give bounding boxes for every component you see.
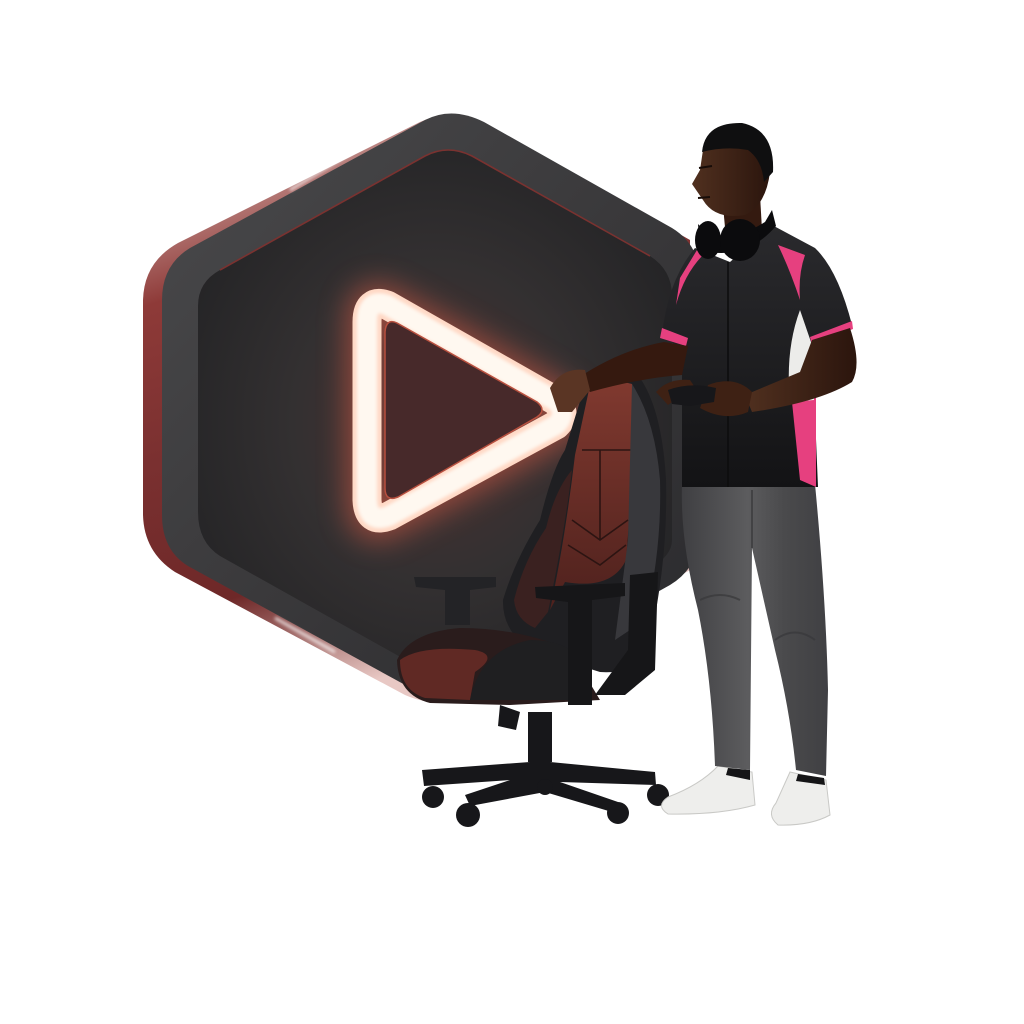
chair base xyxy=(422,705,669,827)
badge dark frame xyxy=(162,113,700,700)
chair left armrest xyxy=(414,577,496,625)
far arm xyxy=(578,342,688,392)
right shoe xyxy=(771,772,830,825)
badge inner panel xyxy=(198,150,672,674)
hexagon badge xyxy=(143,113,700,702)
chair right armrest xyxy=(535,583,625,705)
shirt zipper xyxy=(727,262,729,487)
gaming chair xyxy=(397,375,669,827)
socks xyxy=(726,768,825,785)
neon play icon xyxy=(366,303,566,521)
headphones xyxy=(695,210,776,261)
eye and mouth xyxy=(698,166,712,198)
near arm xyxy=(745,328,857,412)
chair left wing xyxy=(514,470,572,628)
game controller xyxy=(668,385,716,406)
hair xyxy=(702,123,773,182)
neon triangle outline xyxy=(367,303,562,518)
shirt white panel xyxy=(789,310,814,402)
chair back shell xyxy=(503,375,666,672)
head xyxy=(692,128,770,216)
chair seat xyxy=(397,628,600,705)
chair back leather xyxy=(550,381,637,610)
chair side support xyxy=(595,572,658,695)
pants xyxy=(682,484,828,776)
neon inner triangle xyxy=(385,322,542,498)
chair seat cushion xyxy=(400,649,488,700)
standing gamer xyxy=(550,123,857,825)
shirt xyxy=(662,225,852,487)
neon glow xyxy=(366,303,566,521)
badge metallic rim xyxy=(143,115,690,702)
far hand on chair xyxy=(550,370,590,412)
left shoe xyxy=(662,766,755,814)
rim highlights xyxy=(163,152,352,652)
chair side bolster xyxy=(615,384,660,640)
chair stitching xyxy=(568,450,634,565)
shirt pink trim xyxy=(660,245,853,487)
neon bright core xyxy=(367,303,562,518)
holding hand xyxy=(700,381,752,416)
neck xyxy=(722,195,762,238)
panel red edge light xyxy=(220,150,650,270)
chair seat side xyxy=(470,640,585,700)
pants folds xyxy=(700,490,815,640)
holding hand left xyxy=(656,380,694,405)
